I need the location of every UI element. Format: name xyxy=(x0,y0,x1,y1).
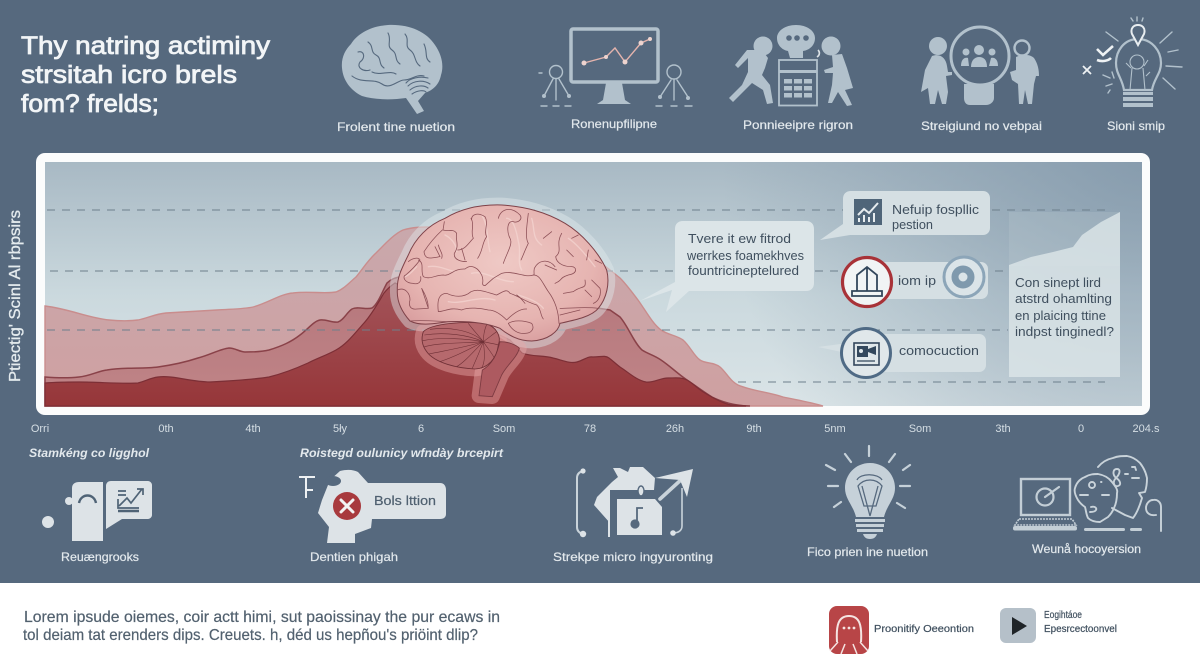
x axis labels: 0 xyxy=(1078,423,1084,435)
icon: red ring xyxy=(842,258,892,306)
label: people with magnifier: Streigiund no vebpai xyxy=(921,119,1042,133)
icon: people with magnifier circle xyxy=(921,27,1039,105)
footer text xyxy=(23,609,500,644)
label: head with badge: Dentien phigah xyxy=(310,550,398,564)
panel: main chart xyxy=(36,153,1150,415)
area: back layer xyxy=(45,227,823,406)
cerebrum xyxy=(397,205,608,341)
panel: side note xyxy=(1009,212,1120,377)
title: fom? frelds; xyxy=(21,90,159,118)
x axis labels xyxy=(31,423,1160,435)
x axis labels: 26h xyxy=(666,423,684,435)
x axis labels: 6 xyxy=(418,423,424,435)
label: filled lightbulb: Fico prien ine nuetion xyxy=(807,545,928,559)
icon: play button xyxy=(1000,608,1036,643)
callout: red circle pill: iom ip xyxy=(898,274,936,288)
title xyxy=(21,32,271,118)
callout: chart icon bubble: Nefuip fospllic xyxy=(892,203,979,217)
icon: head with error badge xyxy=(299,470,446,543)
x axis labels: 78 xyxy=(584,423,596,435)
label: house and arrow: Strekpe micro ingyuronting xyxy=(553,550,713,564)
callout: main text bubble: Tvere it ew fitrod xyxy=(688,232,791,246)
label: red badge: Proonitify Oeeontion xyxy=(874,624,974,635)
x axis labels: 5nm xyxy=(824,423,846,435)
x axis labels: 0th xyxy=(158,423,174,435)
x axis labels: Som xyxy=(493,423,515,435)
panel: side note: indpst tinginedl? xyxy=(1015,325,1114,339)
dashed grid lines xyxy=(47,210,1105,382)
callout: chart icon bubble xyxy=(820,191,990,240)
icon: red hooded badge xyxy=(829,606,869,654)
callout: red circle pill xyxy=(842,257,988,306)
icon: trend chart xyxy=(854,199,882,225)
heading: second section: Roistegd oulunicy wfndày brcepirt xyxy=(300,446,504,460)
icon: blue ring xyxy=(944,257,984,297)
brain highlights xyxy=(405,215,595,308)
y axis label: Ptiectig' Scinl Al rbpsirs xyxy=(7,210,24,382)
icon: filled lightbulb with rays xyxy=(826,446,910,539)
callout: main text bubble: fountricineptelured xyxy=(688,264,799,278)
x axis labels: 5ły xyxy=(333,423,348,435)
title: strsitah icro brels xyxy=(21,61,237,89)
area: middle layer xyxy=(45,277,746,406)
footer text: Lorem ipsude oiemes, coir actt himi, sut paoissinay the pur ecaws in xyxy=(24,609,500,626)
label: document and chart: Reuængrooks xyxy=(61,550,139,564)
icon: top brain xyxy=(342,25,442,114)
brain halo xyxy=(397,205,608,397)
panel: side note: Con sinept lird xyxy=(1015,276,1101,290)
illustration: brain xyxy=(397,205,608,397)
panel: side note: atstrd ohamlting xyxy=(1015,292,1112,306)
x axis labels: 3th xyxy=(995,423,1011,435)
icon: people with calculator and speech bubble xyxy=(729,25,853,106)
icon: monitor with line chart xyxy=(539,29,692,106)
label: people with calculator: Ponnieeipre rigron xyxy=(743,118,853,132)
title: Thy natring actiminy xyxy=(21,32,271,60)
footer band xyxy=(0,583,1200,654)
x axis labels: Orri xyxy=(31,423,49,435)
panel frame xyxy=(36,153,1150,415)
brain folds xyxy=(397,209,602,333)
x axis labels: 204.s xyxy=(1133,423,1160,435)
label: play button xyxy=(1044,610,1117,635)
callout: chart icon bubble: pestion xyxy=(892,218,933,232)
x axis labels: 4th xyxy=(245,423,261,435)
cerebellum xyxy=(422,322,499,369)
footer text: tol deiam tat erenders dips. Creuets. h, déd us hepñou's priöint dlip? xyxy=(23,627,478,644)
callout: communication pill xyxy=(818,328,986,378)
label: play button: Eogihtáoe xyxy=(1044,610,1082,621)
panel: side note: en plaicing ttine xyxy=(1015,309,1106,323)
callout: main text bubble xyxy=(640,221,814,312)
callout: communication pill: comocuction xyxy=(899,344,979,358)
icon: document and chart bubble xyxy=(42,481,152,541)
label: monitor: Ronenupfilipne xyxy=(571,117,657,131)
icon: outlined lightbulb with rays xyxy=(1083,17,1182,107)
icon: house, document and arrow xyxy=(577,467,693,537)
area: front layer xyxy=(45,283,750,406)
label: play button: Epesrcectoonvel xyxy=(1044,624,1117,635)
brain stem xyxy=(479,342,519,397)
icon: head with error badge: Bols lttion xyxy=(374,494,436,508)
icon: navy ring xyxy=(842,328,890,378)
chart background xyxy=(45,162,1142,406)
x axis labels: Som xyxy=(909,423,931,435)
label: top brain: Frolent tine nuetion xyxy=(337,120,455,134)
label: laptop and heads: Weunå hocoyersion xyxy=(1032,542,1141,556)
x axis labels: 9th xyxy=(746,423,762,435)
label: outlined lightbulb: Sioni smip xyxy=(1107,119,1165,133)
heading: left section: Stamkéng co ligghol xyxy=(29,446,150,460)
callout: main text bubble: werrkes foamekhves xyxy=(686,249,804,263)
icon: laptop and heads xyxy=(1013,456,1161,531)
